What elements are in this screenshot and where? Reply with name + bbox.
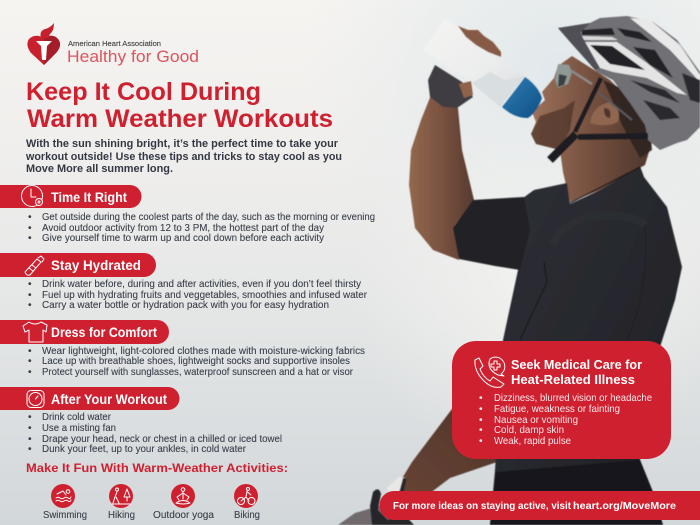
symptoms list [479, 393, 652, 447]
raised arm [409, 95, 474, 260]
tips list: Lace up with breathable shoes, lightweight socks and supportive insoles [42, 356, 350, 367]
jersey sleeve [453, 197, 530, 270]
symptoms list: • [479, 425, 483, 436]
jersey torso [490, 166, 682, 525]
icon: swimmer [51, 484, 75, 508]
tips list: Drape your head, neck or chest in a chilled or iced towel [42, 434, 282, 445]
icon: stopwatch [27, 390, 44, 408]
heading pill: Stay Hydrated [51, 258, 141, 273]
tips list: Fuel up with hydrating fruits and veggetables, smoothies and infused water [42, 290, 368, 301]
symptoms list: Cold, damp skin [494, 425, 564, 436]
symptoms list: • [479, 436, 483, 447]
activity: Hiking [108, 484, 135, 521]
title [26, 78, 333, 133]
neck and face [531, 56, 651, 202]
tips list: • [28, 212, 32, 223]
heading pill: After Your Workout [51, 392, 167, 407]
tips list: • [28, 290, 32, 301]
helmet chin strap [550, 78, 648, 160]
tips list: Get outside during the coolest parts of the day, such as the morning or evening [42, 212, 375, 223]
tips list: • [28, 444, 32, 455]
tips list: • [28, 356, 32, 367]
jersey seams and highlights [520, 167, 646, 345]
heading pill: Dress for Comfort [51, 325, 157, 340]
icon: t-shirt [23, 322, 47, 342]
footer text: heart.org/MoveMore [573, 501, 676, 512]
heading pill [0, 253, 156, 277]
footer text: For more ideas on staying active, visit [393, 501, 572, 512]
tips list: • [28, 412, 32, 423]
tips list: Protect yourself with sunglasses, waterproof sunscreen and a hat or visor [42, 367, 354, 378]
icon: meditating figure [171, 484, 195, 508]
water bottle [423, 19, 542, 118]
symptoms list: Weak, rapid pulse [494, 436, 571, 447]
symptoms list: • [479, 393, 483, 404]
heading: Seek Medical Care for [511, 358, 642, 372]
glove on bottle hand [428, 65, 473, 108]
title: Warm Weather Workouts [27, 105, 333, 133]
label: Swimming [43, 510, 87, 521]
logo: American Heart Association Healthy for Good [27, 23, 199, 66]
intro text [25, 138, 342, 175]
beard, hair and ear [531, 80, 652, 158]
intro text: workout outside! Use these tips and tricks to stay cool as you [25, 151, 342, 163]
tips list [28, 412, 282, 455]
tips list: • [28, 423, 32, 434]
tips list [28, 279, 368, 311]
tips list: • [28, 223, 32, 234]
tips list: • [28, 367, 32, 378]
symptoms list: Dizziness, blurred vision or headache [494, 393, 652, 404]
symptoms list: Fatigue, weakness or fainting [494, 404, 620, 415]
heading pill [0, 320, 169, 344]
footer banner [380, 491, 700, 520]
heading [511, 358, 642, 387]
section: Dress for Comfort [0, 320, 365, 378]
symptoms list: Nausea or vomiting [494, 415, 578, 426]
sunglasses [555, 64, 592, 88]
tips list: • [28, 279, 32, 290]
Healthy for Good wordmark: Healthy for Good [67, 47, 199, 66]
section: Time It Right [0, 185, 375, 244]
icon: phone with medical cross [475, 357, 505, 387]
icon: clock [22, 186, 42, 206]
lower arm [395, 405, 510, 512]
intro text: With the sun shining bright, it’s the perfect time to take your [26, 138, 339, 150]
heading: Heat-Related Illness [511, 373, 635, 387]
heading pill [0, 185, 142, 208]
tips list: Drink water before, during and after activities, even if you don’t feel thirsty [42, 279, 362, 290]
glove on handlebar [338, 489, 414, 525]
fingers [458, 26, 501, 57]
title: Keep It Cool During [26, 78, 261, 106]
tips list: Give yourself time to warm up and cool down before each activity [42, 233, 325, 244]
heading pill [0, 387, 180, 410]
tips list: • [28, 300, 32, 311]
tips list [28, 346, 365, 378]
symptoms list: • [479, 415, 483, 426]
activity: Swimming [43, 484, 87, 521]
tips list: • [28, 346, 32, 357]
activity: Outdoor yoga [153, 484, 214, 521]
label: Outdoor yoga [153, 510, 214, 521]
tips list: Drink cold water [42, 412, 112, 423]
icon: hiker and tree [109, 484, 133, 508]
panel: seek medical care [452, 341, 671, 459]
label: Biking [234, 510, 260, 521]
activity: Biking [234, 484, 260, 521]
helmet [558, 16, 700, 150]
photo: cyclist drinking from water bottle [338, 16, 700, 525]
section: After Your Workout [0, 387, 282, 455]
watch [387, 477, 407, 497]
tips list: • [28, 434, 32, 445]
label: Hiking [108, 510, 135, 521]
intro text: Move More all summer long. [26, 163, 173, 175]
tips list: Use a misting fan [42, 423, 116, 434]
shorts below jersey hem [490, 460, 663, 525]
icon: cyclist [234, 484, 258, 508]
tips list: Dunk your feet, up to your ankles, in cold water [42, 444, 247, 455]
heart and torch icon [27, 23, 60, 65]
symptoms list: • [479, 404, 483, 415]
tips list: Carry a water bottle or hydration pack with you for easy hydration [42, 300, 329, 311]
tips list [28, 212, 375, 244]
heading pill: Time It Right [51, 190, 127, 205]
tips list: Wear lightweight, light-colored clothes made with moisture-wicking fabrics [42, 346, 365, 357]
tips list: • [28, 233, 32, 244]
section: Stay Hydrated [0, 253, 368, 311]
activities heading: Make It Fun With Warm-Weather Activities: [26, 461, 288, 475]
tips list: Avoid outdoor activity from 12 to 3 PM, the hottest part of the day [42, 223, 325, 234]
icon: water bottle [25, 256, 44, 275]
organisation name: American Heart Association [68, 39, 161, 48]
